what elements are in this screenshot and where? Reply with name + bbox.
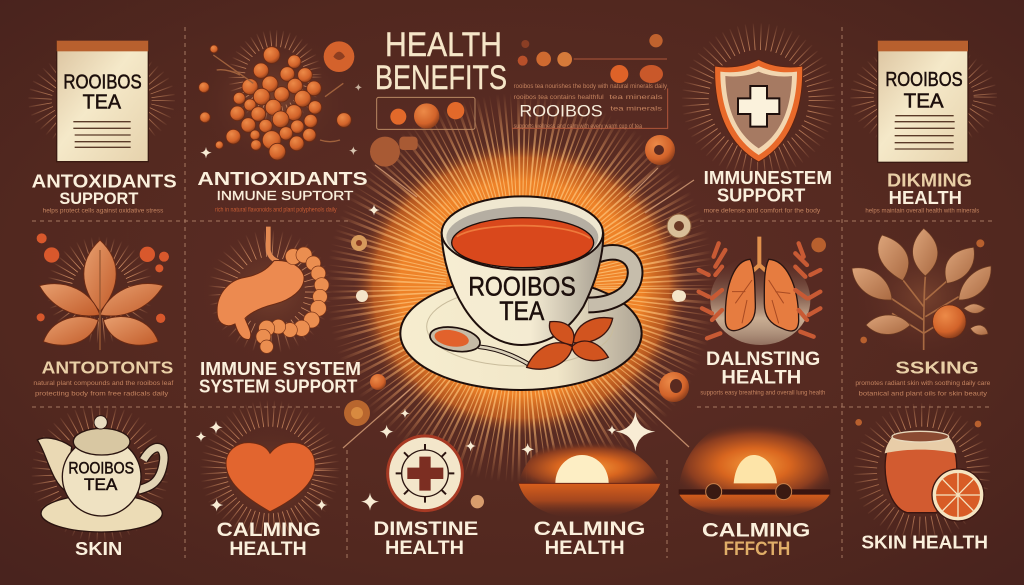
rooibos header block with small text: supports wellness and calm with every warm cup of tea [514, 123, 642, 130]
rooibos header block with small text: rooibos tea nourishes the body with natural minerals daily [514, 83, 668, 90]
small text: protecting body from free radicals daily [35, 390, 169, 397]
title: health benefits: HEALTH [385, 26, 502, 64]
heading: calming effcth: FFFCTH [724, 539, 790, 560]
rooibos leaves [527, 318, 613, 369]
heading: diming health [887, 170, 972, 208]
rooibos header block with small text [512, 34, 668, 130]
heading: antioxidants immune support [197, 168, 368, 203]
icon: stomach and intestine [198, 227, 342, 355]
icon: tea bag [40, 41, 163, 162]
panel: immune shield [695, 37, 832, 214]
icon: leaf branch with fruit [852, 228, 995, 358]
heading: immunestem support [704, 167, 832, 206]
small text [33, 380, 174, 397]
panel: stomach, immune system support [198, 227, 361, 397]
rooibos header block with small text: ROOIBOS [519, 102, 603, 121]
heading: antoxidants support: ANTOXIDANTS [32, 170, 177, 191]
panel: teapot, skin [37, 416, 164, 559]
small text: supports easy breathing and overall lung health [700, 390, 826, 397]
heading: antodtonts: ANTODTONTS [42, 357, 173, 377]
heading: diming health: HEALTH [889, 187, 962, 208]
heading: calming health: CALMING [217, 520, 321, 541]
heading: skin health: SKIN HEALTH [861, 531, 988, 552]
icon: tea bag: ROOIBOS [63, 70, 142, 93]
small text: botanical and plant oils for skin beauty [859, 390, 988, 397]
heading: dimstine health: DIMSTINE [373, 519, 478, 540]
heading: calming health: CALMING [534, 519, 645, 540]
panel: leaf, antodtonts [33, 233, 174, 397]
small text: helps protect cells against oxidative stress [43, 207, 163, 214]
panel: lungs, dalnsting health [675, 237, 826, 397]
glow behind the cup [353, 140, 689, 436]
cup label: ROOIBOS [468, 272, 576, 302]
panel: antioxidants berries [197, 33, 380, 216]
icon: berry cluster [198, 33, 380, 216]
heading: immune system support: IMMUNE SYSTEM [200, 358, 361, 379]
panel: plant, ssking [852, 228, 995, 397]
small text: helps maintain overall health with minerals [865, 207, 979, 214]
small text: natural plant compounds and the rooibos leaf [33, 380, 174, 387]
heading: dalnsting health [706, 349, 820, 388]
cup handle [588, 252, 635, 305]
heading: ssking: SSKING [895, 357, 979, 377]
floating orbs around the cup [344, 135, 691, 426]
icon: glowing sun with dark band [679, 418, 830, 518]
heading: dalnsting health: DALNSTING [706, 349, 820, 370]
heading: antioxidants immune support: INMUNE SUPTORT [217, 188, 353, 203]
icon: tea bag: ROOIBOS [885, 68, 963, 91]
panel: rooibos tea bag, antioxidants support [32, 41, 177, 214]
cup label: TEA [499, 296, 545, 326]
panel: sunset with wheels, calming effcth [679, 418, 830, 560]
heading: dimstine health: HEALTH [385, 538, 464, 559]
title: health benefits [375, 26, 507, 97]
heading: diming health: DIKMING [887, 170, 972, 191]
heading: antoxidants support: SUPPORT [59, 189, 138, 208]
heading: immunestem support: IMMUNESTEM [704, 167, 832, 188]
heading: calming effcth [702, 521, 810, 560]
heading: dalnsting health: HEALTH [721, 367, 801, 388]
icon: heart [196, 413, 333, 533]
icon: teapot on saucer: ROOIBOS [68, 458, 134, 477]
rooibos header block with small text: tea minerals [610, 106, 662, 113]
heading: skin: SKIN [75, 538, 122, 559]
icon: teapot on saucer: TEA [84, 475, 118, 494]
heading: calming health: HEALTH [229, 539, 307, 560]
panel: compass, dimstine health [361, 409, 484, 559]
cup label [468, 272, 576, 326]
small text: rich in natural flavonoids and plant polyphenols daily [215, 208, 337, 214]
icon: sun over the sea [519, 412, 660, 518]
icon: lungs with branches [675, 237, 826, 345]
panel: glass and citrus, skin health [855, 415, 988, 552]
title decorations: fruit row [370, 97, 475, 167]
panel: sunset, calming health [519, 412, 660, 559]
panel: heart, calming health [196, 413, 333, 560]
heading: calming health [217, 520, 321, 560]
heading: dimstine health [373, 519, 478, 559]
icon: shield with cross [695, 37, 822, 163]
tea cup illustration [400, 196, 642, 390]
connector lines [343, 165, 694, 448]
icon: round medical dial [361, 409, 484, 511]
spoon [428, 323, 530, 365]
heading: antoxidants support [32, 170, 177, 208]
small text: more defense and comfort for the body [704, 207, 821, 214]
heading: antioxidants immune support: ANTIOXIDANTS [197, 168, 368, 189]
icon: teapot on saucer [37, 416, 164, 532]
rooibos header block with small text: tea minerals [609, 94, 663, 101]
title: health benefits: BENEFITS [375, 59, 507, 97]
heading: immune system support: SYSTEM SUPPORT [199, 376, 358, 397]
icon: tea bag [862, 41, 985, 162]
small text: promotes radiant skin with soothing daily care [855, 380, 991, 387]
cup body [442, 196, 603, 345]
icon: tea bag: TEA [904, 89, 944, 112]
heading: immunestem support: SUPPORT [717, 185, 806, 206]
icon: tea bag: TEA [83, 90, 121, 113]
central glow and cup [353, 140, 689, 436]
panel: rooibos tea bag, diming health [862, 41, 985, 214]
heading: calming health: HEALTH [545, 538, 625, 559]
heading: immune system support [199, 358, 361, 397]
heading: calming effcth: CALMING [702, 521, 810, 542]
heading: calming health [534, 519, 645, 559]
small text [855, 380, 991, 397]
rooibos header block with small text: rooibos tea contains healthful [514, 94, 604, 101]
saucer [400, 277, 642, 390]
icon: rooibos leaves [37, 233, 169, 350]
icon: glass of tea with citrus slice [855, 415, 984, 528]
